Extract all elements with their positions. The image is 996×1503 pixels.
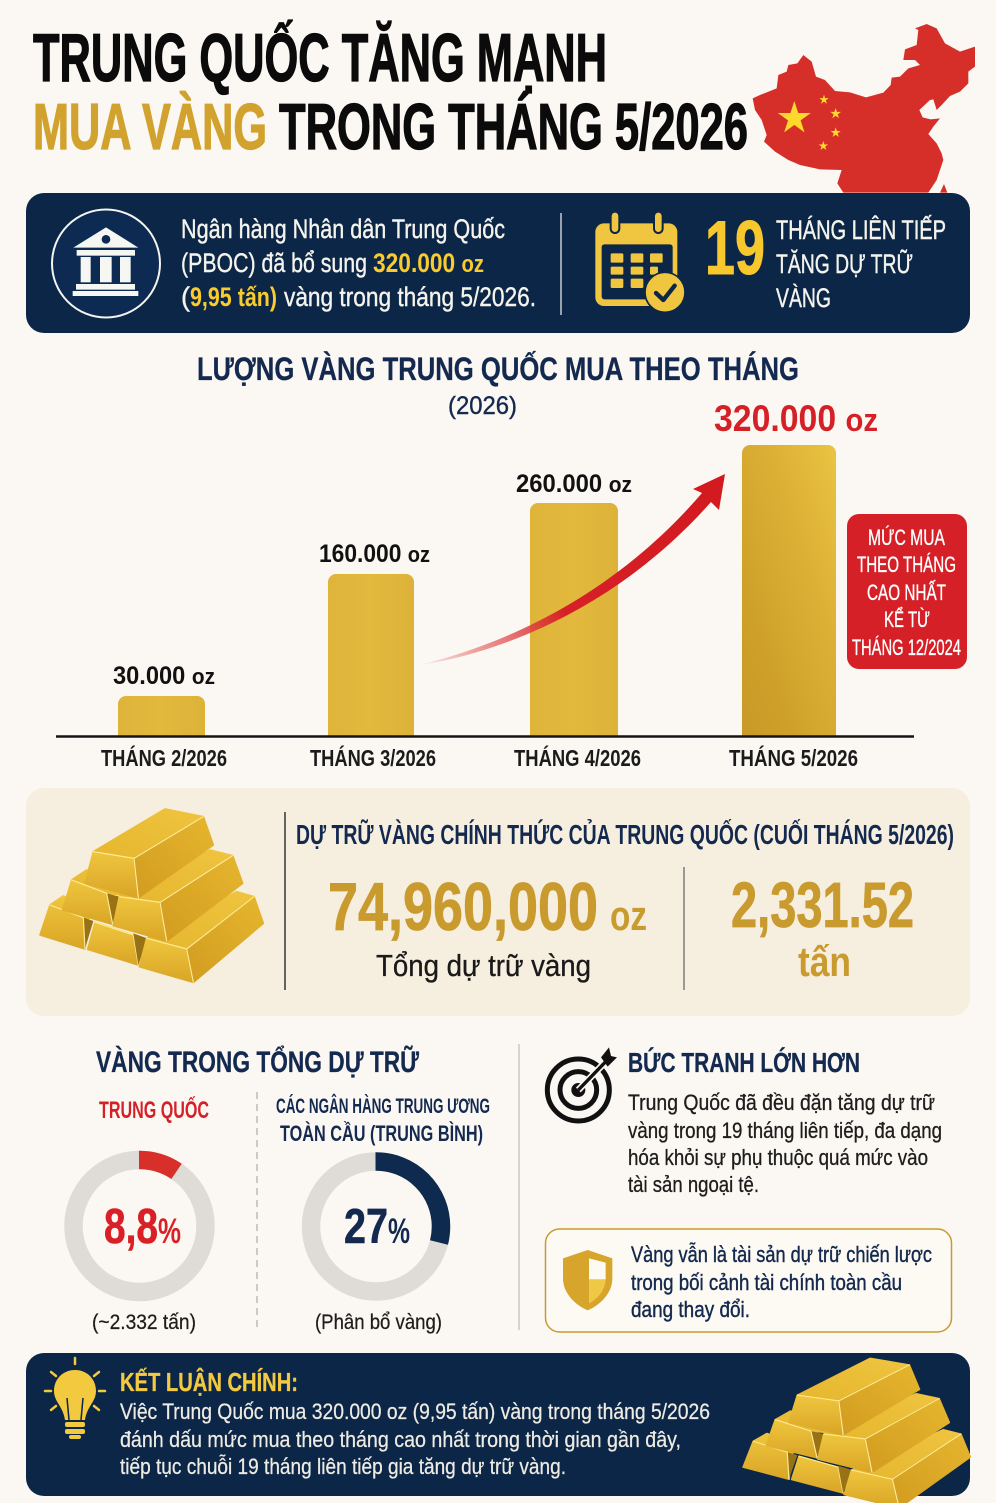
stat: total ounces (328, 869, 647, 983)
chart heading: LƯỢNG VÀNG TRUNG QUỐC MUA THEO THÁNG (197, 351, 799, 387)
panel: the bigger picture (546, 1047, 952, 1332)
text: PBOC purchase: vàng trong tháng 5/2026. (284, 282, 536, 312)
panel: official gold reserves (26, 788, 970, 1016)
stat: tonnes: tấn (798, 938, 851, 985)
title: TRONG THÁNG 5/2026 (279, 90, 748, 163)
donut: global central banks 27%: TOÀN CẦU (TRUNG BÌNH) (280, 1121, 483, 1146)
text: PBOC purchase: ( (181, 282, 190, 312)
icon: gold bar stack (40, 809, 263, 982)
callout: strategic reserve asset: đang thay đổi. (631, 1297, 750, 1322)
icon: gold bar stack on banner (743, 1358, 970, 1503)
heading: conclusion: KẾT LUẬN CHÍNH: (120, 1367, 298, 1397)
donut: global central banks 27%: % (388, 1212, 410, 1251)
text: conclusion paragraph: Việc Trung Quốc mua 320.000 oz (9,95 tấn) vàng trong tháng 5/2026 (120, 1399, 710, 1424)
text: conclusion paragraph: đánh dấu mức mua theo tháng cao nhất trong thời gian gần đây, (120, 1427, 681, 1452)
callout: highest monthly purchase: CAO NHẤT (867, 580, 946, 605)
heading: bigger picture: BỨC TRANH LỚN HƠN (628, 1047, 860, 1078)
bar: March: THÁNG 3/2026 (310, 744, 436, 771)
text: PBOC purchase: Ngân hàng Nhân dân Trung Quốc (181, 214, 505, 244)
donut: China 8.8%: (~2.332 tấn) (92, 1311, 196, 1334)
text: bigger picture paragraph: Trung Quốc đã đều đặn tăng dự trữ (628, 1090, 935, 1115)
panel: monthly purchase chart (56, 351, 967, 771)
donut: global central banks 27%: CÁC NGÂN HÀNG TRUNG ƯƠNG (276, 1094, 490, 1118)
bar: March: 160.000 oz (319, 540, 430, 568)
panel: main conclusion (26, 1353, 970, 1503)
text: PBOC purchase: 320.000 oz (373, 248, 484, 278)
panel: summary banner (26, 193, 970, 333)
bar: April: 260.000 oz (516, 470, 632, 498)
panel: gold share of reserves (74, 1045, 490, 1334)
text: PBOC purchase: 9,95 tấn) (190, 282, 277, 312)
donut: China 8.8% (74, 1096, 209, 1334)
stat: total ounces: Tổng dự trữ vàng (376, 948, 591, 983)
donut: China 8.8%: TRUNG QUỐC (99, 1096, 209, 1124)
callout: highest monthly purchase: KỂ TỪ (884, 607, 930, 632)
icon: shield (563, 1250, 612, 1310)
stat: tonnes: 2,331.52 (731, 869, 914, 941)
icon: map of China with flag stars (753, 24, 975, 193)
bar: February: THÁNG 2/2026 (101, 744, 227, 771)
bar: February (101, 662, 227, 771)
bar: April (514, 470, 641, 771)
callout: strategic reserve asset: trong bối cảnh tài chính toàn cầu (631, 1270, 902, 1295)
title: TRUNG QUỐC TĂNG MẠNH (33, 19, 607, 96)
icon: central bank building (52, 210, 160, 318)
donut: China 8.8%: 8,8 (104, 1200, 158, 1254)
heading: gold share: VÀNG TRONG TỔNG DỰ TRỮ (96, 1045, 419, 1079)
donut: global central banks 27% (276, 1094, 490, 1334)
bar: May (714, 398, 878, 771)
text: PBOC purchase (181, 214, 536, 312)
text: bigger picture paragraph (628, 1090, 942, 1197)
chart heading (197, 351, 799, 420)
callout: strategic reserve asset: Vàng vẫn là tài sản dự trữ chiến lược (631, 1242, 932, 1267)
text: bigger picture paragraph: hóa khỏi sự phụ thuộc quá mức vào (628, 1145, 928, 1170)
bar: April: THÁNG 4/2026 (514, 744, 641, 771)
title (33, 19, 748, 163)
icon: calendar with check (595, 212, 685, 312)
bar: May: THÁNG 5/2026 (729, 744, 858, 771)
callout: highest monthly purchase: MỨC MUA (868, 525, 945, 550)
bar: February: 30.000 oz (113, 662, 215, 690)
text: PBOC purchase: (PBOC) đã bổ sung (181, 248, 367, 278)
stat: 19 months: TĂNG DỰ TRỮ (776, 248, 913, 279)
donut: China 8.8%: % (158, 1212, 181, 1251)
icon: target with arrow (547, 1047, 617, 1121)
stat: 19 months: VÀNG (776, 283, 831, 313)
chart heading: (2026) (448, 392, 517, 420)
bar: May: 320.000 oz (714, 398, 878, 439)
stat: total ounces: 74,960,000 (328, 869, 598, 945)
donut: global central banks 27%: (Phân bổ vàng) (315, 1311, 442, 1334)
text: conclusion paragraph (120, 1399, 710, 1479)
stat: 19 months (705, 206, 946, 313)
stat: total ounces: oz (610, 892, 647, 939)
bar: March (310, 540, 436, 771)
stat: 19 months: 19 (705, 206, 765, 291)
text: bigger picture paragraph: tài sản ngoại tệ. (628, 1172, 759, 1197)
text: bigger picture paragraph: vàng trong 19 tháng liên tiếp, đa dạng (628, 1118, 942, 1143)
stat: tonnes (731, 869, 914, 985)
text: conclusion paragraph: tiếp tục chuỗi 19 tháng liên tiếp gia tăng dự trữ vàng. (120, 1454, 566, 1479)
title: MUA VÀNG (33, 90, 267, 163)
icon: light bulb (45, 1358, 105, 1439)
donut: global central banks 27%: 27 (344, 1200, 388, 1254)
callout: highest monthly purchase (847, 514, 967, 669)
callout: strategic reserve asset (546, 1229, 952, 1332)
arrow: rising trend (420, 474, 725, 665)
